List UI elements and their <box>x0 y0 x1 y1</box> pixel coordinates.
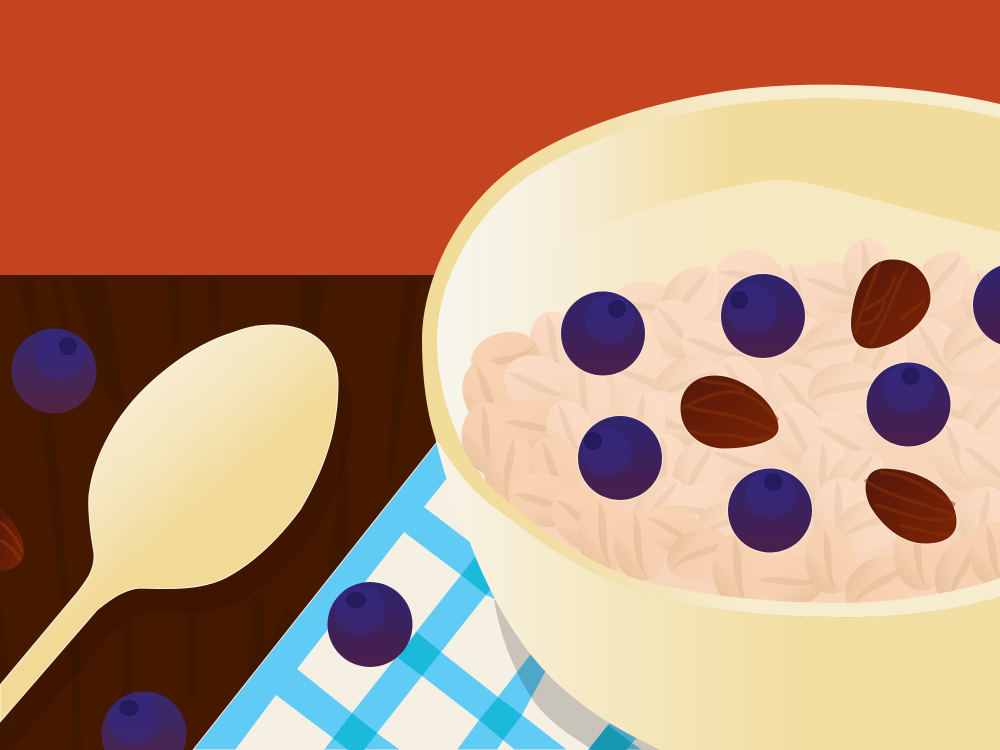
darker crossings <box>333 549 632 750</box>
inner wall highlight <box>470 180 1000 578</box>
blueberries in bowl <box>560 262 1000 553</box>
bowl <box>422 85 1000 750</box>
blueberry 5 <box>728 468 812 553</box>
blueberry 3 <box>578 416 662 500</box>
wooden table <box>0 275 1000 750</box>
spoon <box>0 325 338 722</box>
blueberry 2 <box>720 274 806 358</box>
background wall <box>0 0 1000 276</box>
oatmeal base <box>462 275 1000 603</box>
oatmeal <box>453 236 1000 628</box>
almond on table <box>0 507 24 571</box>
bowl rim <box>422 85 1000 617</box>
blueberry 4 <box>866 362 951 447</box>
bowl inner wall <box>437 98 1000 603</box>
bowl front lip <box>430 400 1000 617</box>
blueberry on table, bottom <box>102 692 186 750</box>
wood grain <box>0 276 420 750</box>
cream cells <box>235 478 700 750</box>
spoon shadow <box>14 349 352 746</box>
oat flakes <box>453 236 1000 628</box>
checked cloth <box>193 442 700 750</box>
bowl front below lip <box>435 437 1000 750</box>
almond, lower right <box>865 468 957 544</box>
bowl shadow on cloth <box>494 560 720 750</box>
almond, upper right <box>851 259 931 349</box>
blueberry on cloth <box>328 582 412 667</box>
blueberry 1 <box>560 291 646 376</box>
blueberry on table, upper left <box>12 328 96 414</box>
almond, centre <box>680 375 779 449</box>
blueberry 6, cut by the edge <box>972 262 1000 348</box>
